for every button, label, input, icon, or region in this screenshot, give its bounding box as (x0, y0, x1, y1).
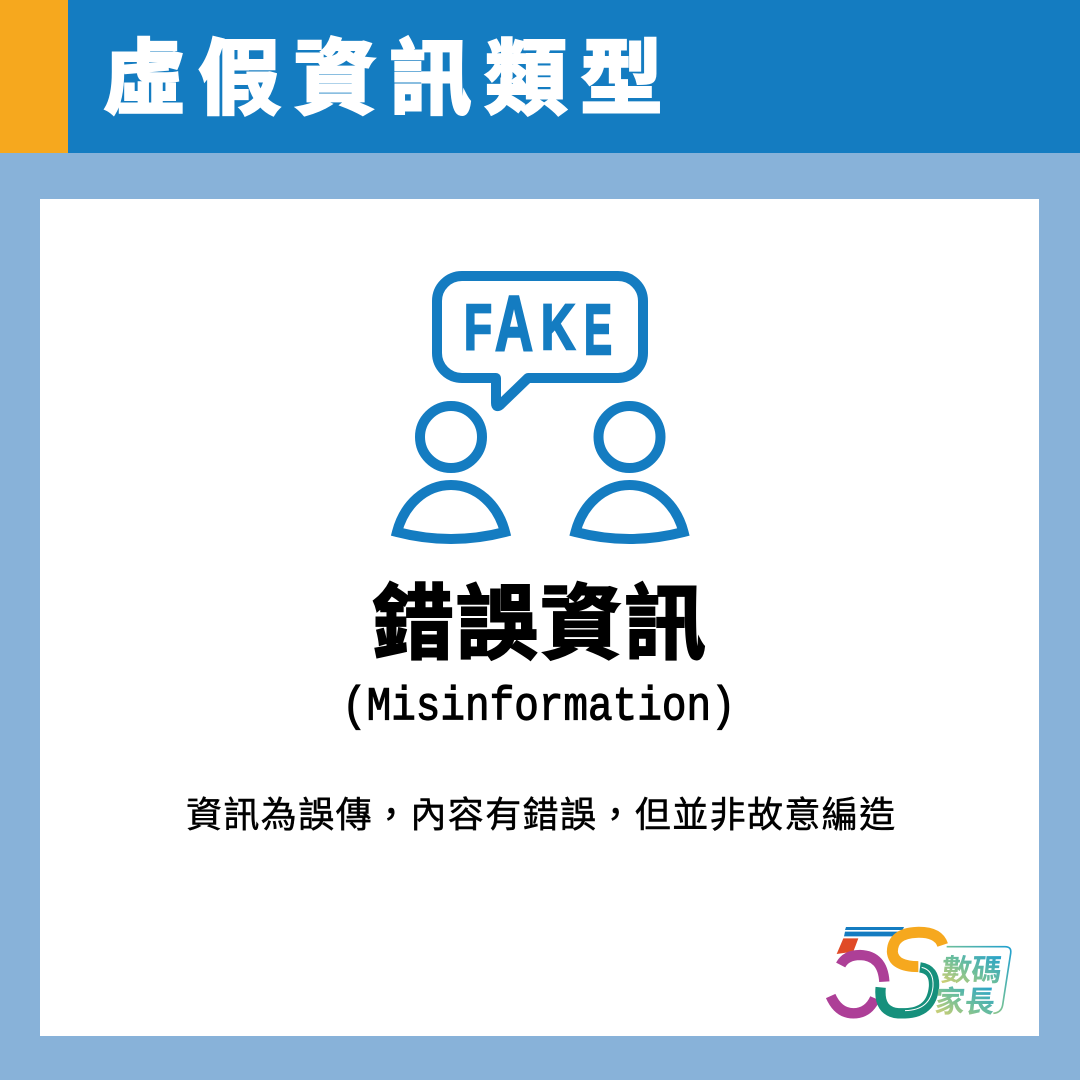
FAKE label: E (584, 291, 612, 370)
description text: 資訊為誤傳，內容有錯誤，但並非故意編造 (186, 794, 897, 835)
icon: right person (576, 406, 684, 539)
logo frame (947, 947, 1011, 1013)
subheading: English term: (Misinformation) (342, 682, 736, 734)
logo: 55 anniversary digital parents (826, 926, 1012, 1019)
logo red wedge (837, 938, 858, 954)
logo orange stroke (892, 932, 943, 967)
FAKE label (464, 279, 612, 370)
white content panel (40, 199, 1039, 1036)
FAKE label: K (541, 291, 575, 363)
FAKE label: A (495, 279, 533, 367)
logo green stroke (880, 967, 934, 1013)
logo stripes (844, 927, 904, 936)
icon: left person (397, 406, 505, 539)
heading: misinformation in Chinese: 錯誤資訊 (372, 579, 708, 670)
orange accent block (0, 0, 68, 153)
logo purple five (831, 955, 884, 1013)
title: 虛假資訊類型 (103, 34, 676, 125)
logo text: 家長 (933, 986, 997, 1019)
icon: two people talking about fake news (390, 271, 690, 544)
logo text (933, 955, 1003, 1019)
header bar (0, 0, 1080, 153)
FAKE label: F (464, 291, 492, 363)
logo text: 數碼 (940, 955, 1003, 988)
icon: speech bubble (437, 276, 643, 406)
